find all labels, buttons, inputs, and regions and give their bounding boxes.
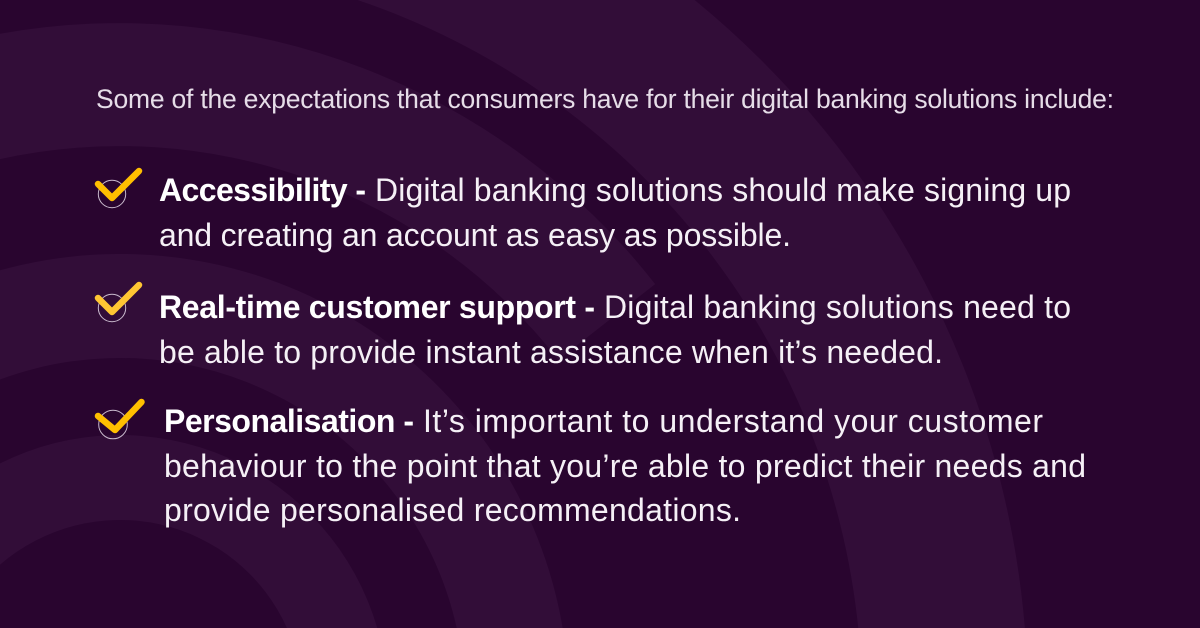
personalisation text: behaviour to the point that you’re able to predict their needs and (164, 448, 1086, 484)
intro text: Some of the expectations that consumers have for their digital banking solutions include: (96, 84, 1114, 114)
accessibility text: Accessibility - (159, 172, 366, 208)
personalisation text: provide personalised recommendations. (164, 492, 741, 528)
accessibility text (159, 172, 1071, 253)
item: accessibility (98, 171, 1071, 253)
item: personalisation (98, 402, 1086, 528)
real-time support text: Digital banking solutions need to (604, 289, 1071, 325)
item: real-time customer support (98, 285, 1071, 370)
personalisation text: Personalisation - (164, 403, 414, 439)
icon: check mark 2 (98, 285, 139, 322)
icon: check mark 1 (98, 171, 139, 208)
personalisation text (164, 403, 1086, 528)
icon: check mark 3 (98, 402, 142, 439)
real-time support text: Real-time customer support - (159, 289, 595, 325)
accessibility text: Digital banking solutions should make signing up (375, 172, 1071, 208)
real-time support text (159, 289, 1071, 370)
accessibility text: and creating an account as easy as possible. (159, 217, 791, 253)
real-time support text: be able to provide instant assistance when it’s needed. (159, 334, 943, 370)
personalisation text: It’s important to understand your customer (423, 403, 1043, 439)
